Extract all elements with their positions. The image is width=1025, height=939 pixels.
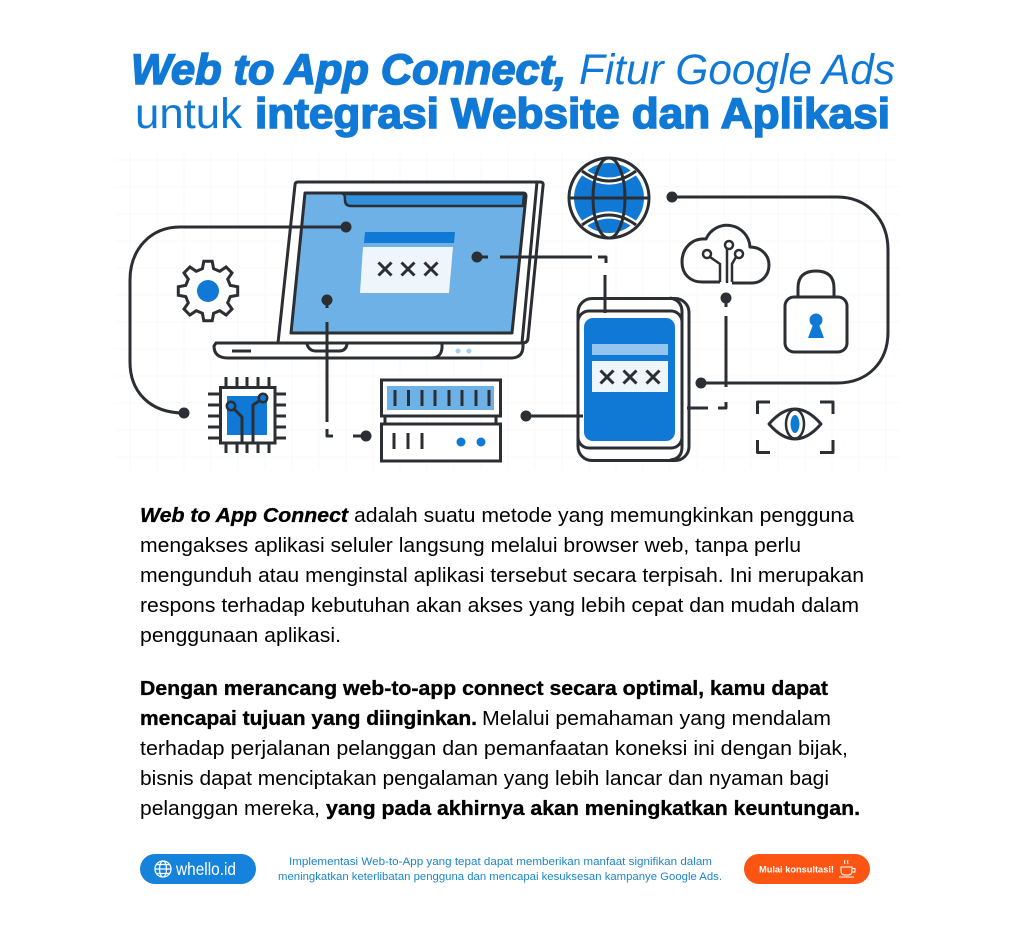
paragraph 2: pelanggan mereka, [140, 798, 320, 820]
paragraph 2: bisnis dapat menciptakan pengalaman yang lebih lancar dan nyaman bagi [140, 768, 829, 790]
paragraph 2: yang pada akhirnya akan meningkatkan keuntungan. [326, 798, 860, 820]
button: Mulai konsultasi [744, 854, 870, 884]
connector: laptop screen to phone [472, 252, 606, 313]
icon: padlock [785, 271, 847, 352]
footer message: meningkatkan keterlibatan pengguna dan mencapai kesuksesan kampanye Google Ads. [278, 871, 722, 883]
paragraph 1: respons terhadap kebutuhan akan akses yang lebih cepat dan mudah dalam [140, 595, 859, 617]
button: whello.id: whello.id [175, 859, 236, 879]
title: integrasi Website dan Aplikasi [255, 90, 890, 138]
paragraph 1: Web to App Connect [140, 505, 349, 527]
connector: server to phone [520, 410, 583, 422]
icon: globe [569, 158, 649, 238]
footer message: Implementasi Web-to-App yang tepat dapat memberikan manfaat signifikan dalam [289, 856, 712, 868]
button: whello.id [140, 854, 256, 884]
paragraph 2: terhadap perjalanan pelanggan dan pemanfaatan koneksi ini dengan bijak, [140, 738, 848, 760]
connector: laptop screen to chip [130, 222, 352, 418]
paragraph 1 [140, 505, 864, 647]
title: untuk [135, 90, 242, 138]
button: Mulai konsultasi: Mulai konsultasi! [759, 864, 834, 876]
footer message [278, 856, 722, 883]
connector: laptop screen to server [322, 294, 372, 442]
icon: chip [208, 377, 286, 453]
icon: phone [578, 298, 689, 460]
paragraph 1: mengakses aplikasi seluler langsung melalui browser web, tanpa perlu [140, 535, 801, 557]
connector: globe to phone [666, 192, 888, 388]
icon: gear [178, 261, 238, 321]
paragraph 2 [140, 678, 860, 820]
title [131, 46, 895, 138]
paragraph 2: mencapai tujuan yang diinginkan. [140, 708, 477, 730]
paragraph 1: mengunduh atau menginstal aplikasi tersebut secara terpisah. Ini merupakan [140, 565, 864, 587]
paragraph 1: penggunaan aplikasi. [140, 625, 341, 647]
paragraph 1: adalah suatu metode yang memungkinkan pengguna [354, 505, 855, 527]
paragraph 2: Melalui pemahaman yang mendalam [482, 708, 831, 730]
icon: cloud [682, 225, 769, 283]
title: Fitur Google Ads [579, 46, 895, 94]
icon: laptop [214, 182, 543, 358]
connector: cloud to phone [687, 292, 732, 408]
icon: server [382, 380, 500, 461]
icon: eye [758, 402, 833, 452]
title: Web to App Connect, [131, 46, 566, 94]
paragraph 2: Dengan merancang web-to-app connect secara optimal, kamu dapat [140, 678, 828, 700]
